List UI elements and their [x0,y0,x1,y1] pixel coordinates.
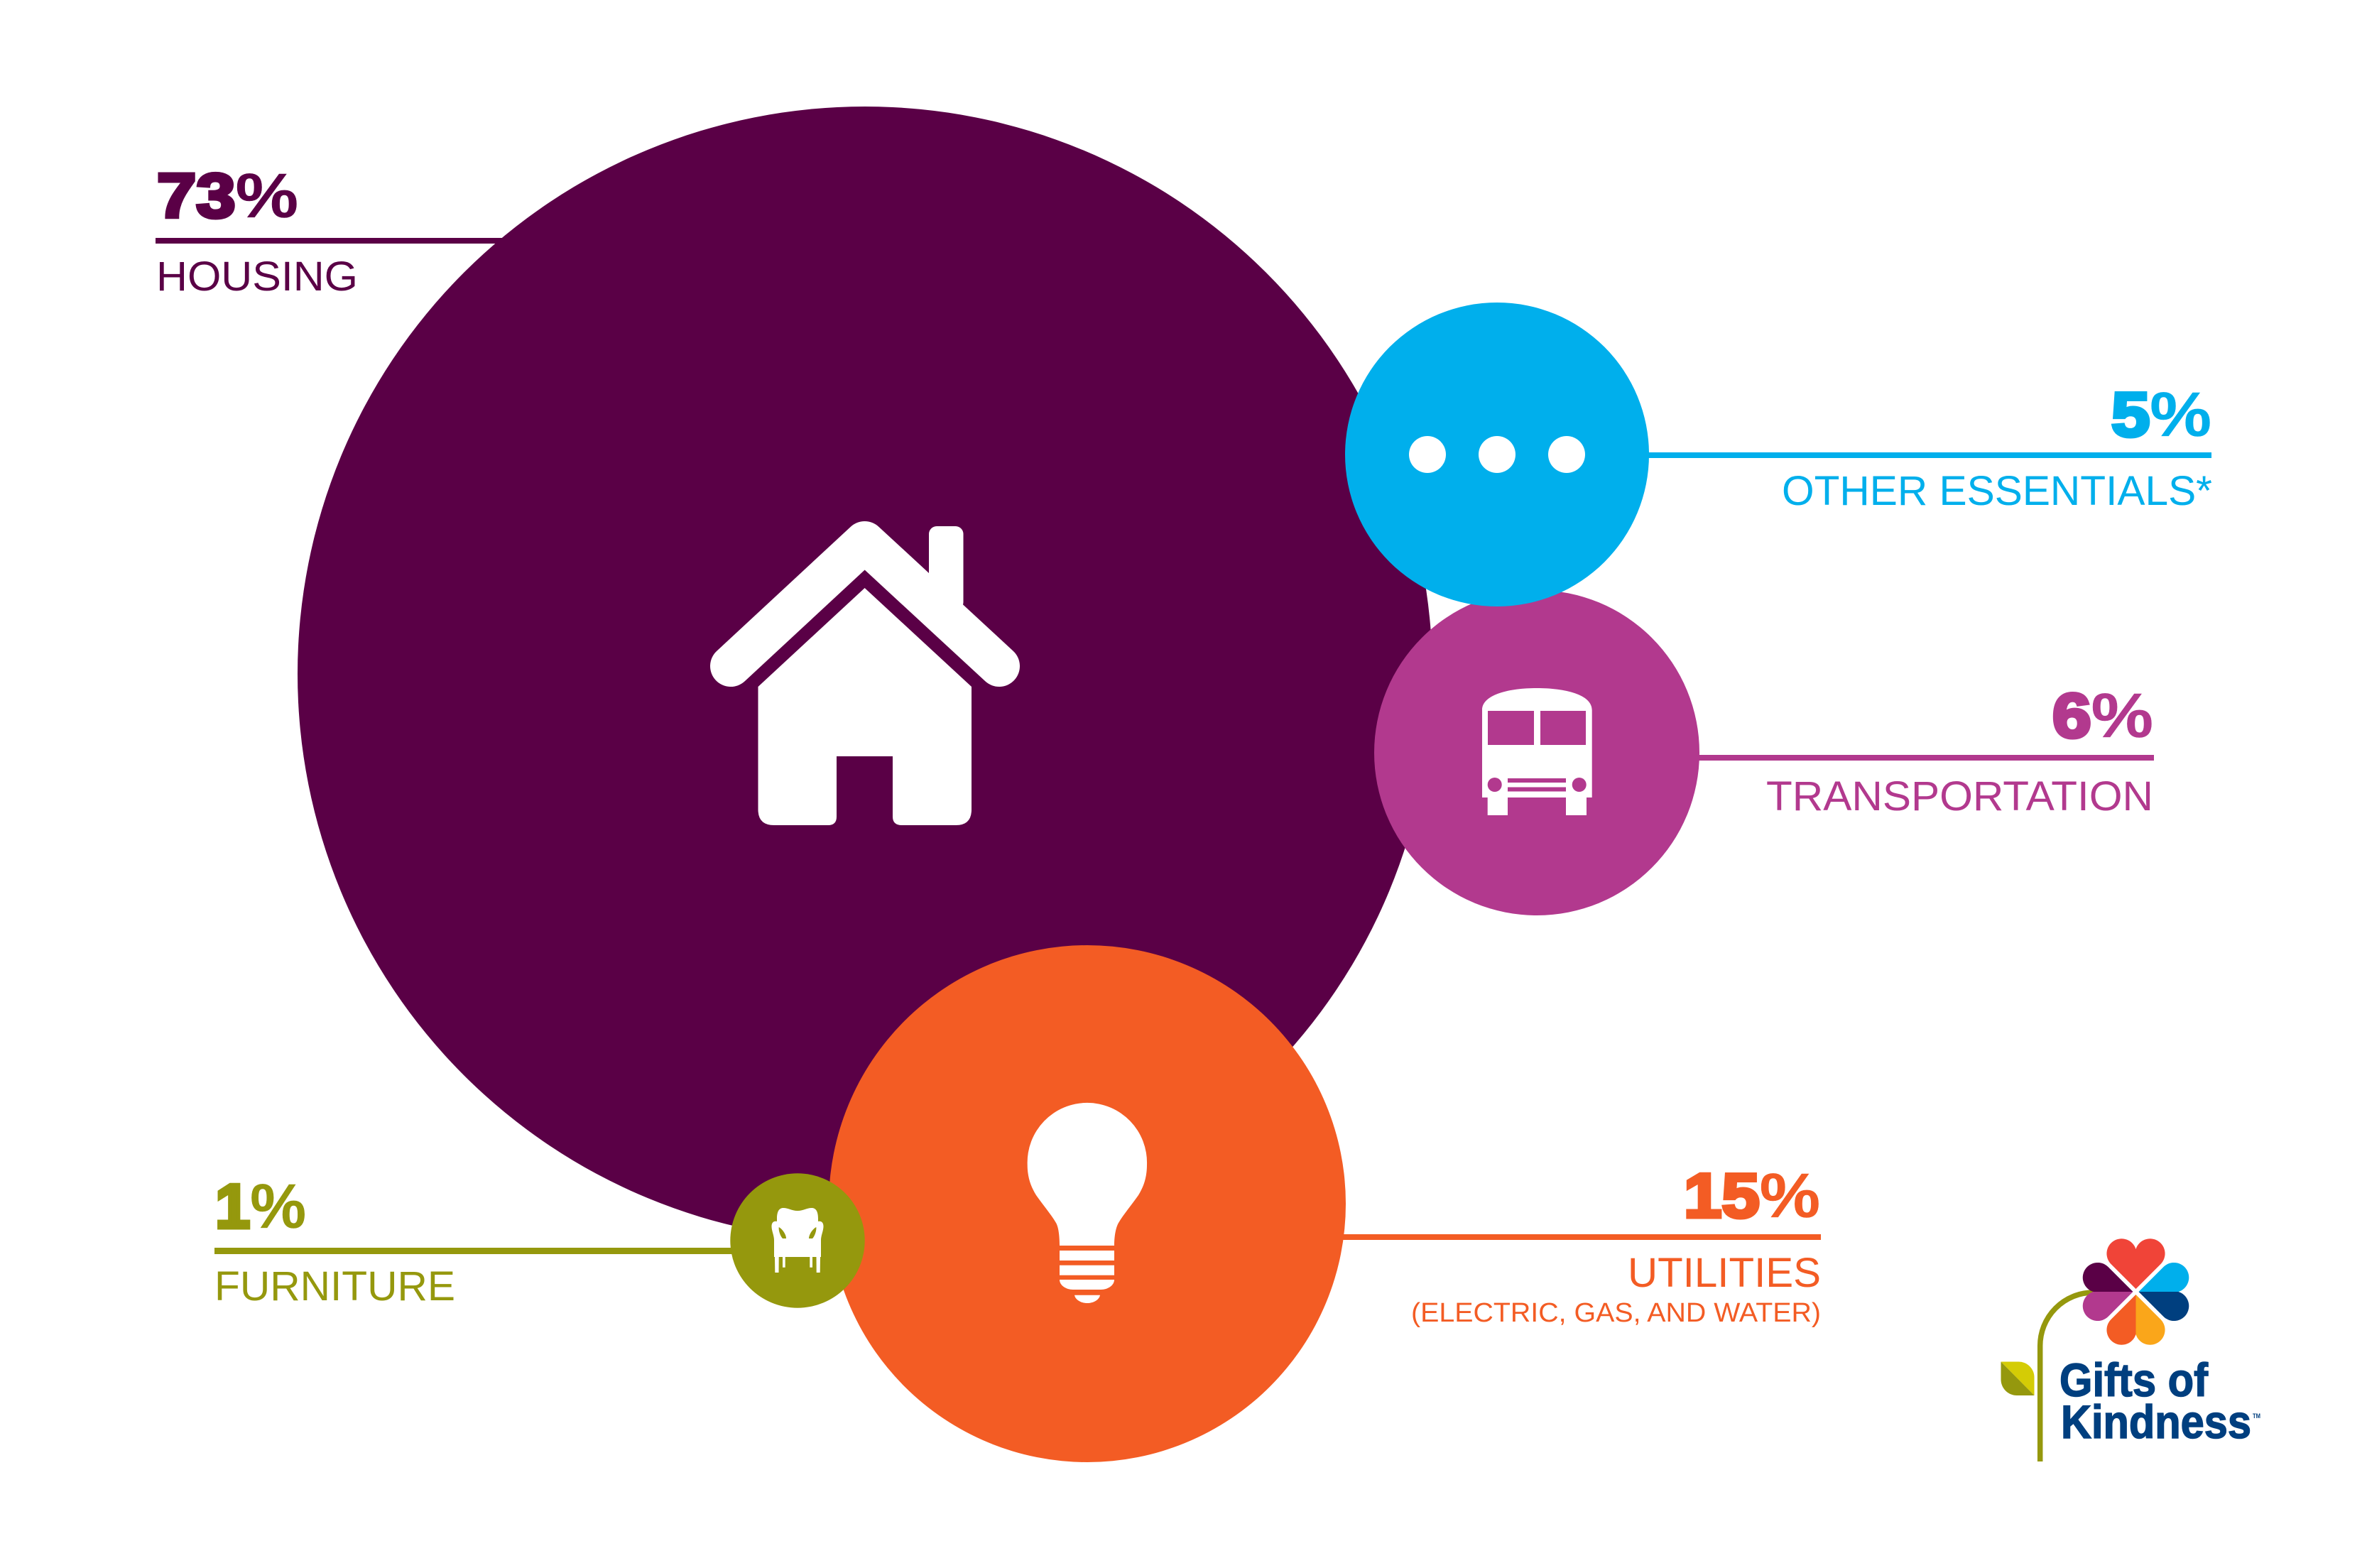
housing label: HOUSING [156,254,358,300]
transportation percentage: 6% [2052,680,2153,751]
transportation circle [1374,590,1699,915]
other essentials circle [1345,303,1649,606]
transportation leader line [1690,755,2154,761]
other essentials leader line [1633,452,2211,458]
logo flower [2083,1238,2189,1345]
utilities circle [829,945,1346,1462]
utilities sub-label: (ELECTRIC, GAS, AND WATER) [1411,1298,1821,1328]
logo wordmark: Gifts of [2059,1354,2209,1406]
furniture label: FURNITURE [214,1263,455,1310]
logo wordmark [2059,1354,2260,1448]
furniture leader line [214,1248,740,1254]
logo wordmark: Kindness [2061,1395,2251,1448]
transportation label: TRANSPORTATION [1766,773,2153,820]
panel: housing 73% [156,107,1432,1241]
housing circle [298,107,1432,1241]
logo stem [2040,1292,2093,1461]
furniture circle [730,1173,865,1308]
panel: furniture 1% [214,1171,865,1310]
logo leaf [2001,1361,2035,1395]
housing percentage: 73% [157,160,298,231]
logo: Gifts of Kindness [2001,1238,2260,1461]
panel: utilities 15% [829,945,1821,1462]
furniture percentage: 1% [215,1171,306,1241]
other essentials percentage: 5% [2111,379,2211,450]
other essentials label: OTHER ESSENTIALS* [1782,468,2212,514]
icon: bus [1482,688,1592,815]
utilities leader line [1314,1234,1821,1240]
housing leader line [156,238,511,244]
icon: house [731,526,999,825]
panel: transportation 6% [1374,590,2154,915]
logo wordmark: TM [2253,1412,2260,1420]
utilities label: UTILITIES [1628,1250,1821,1296]
panel: other essentials 5% [1345,303,2212,606]
icon: three dots [1409,436,1585,473]
utilities percentage: 15% [1684,1160,1820,1231]
icon: light bulb [1028,1103,1147,1303]
icon: armchair [771,1208,824,1273]
